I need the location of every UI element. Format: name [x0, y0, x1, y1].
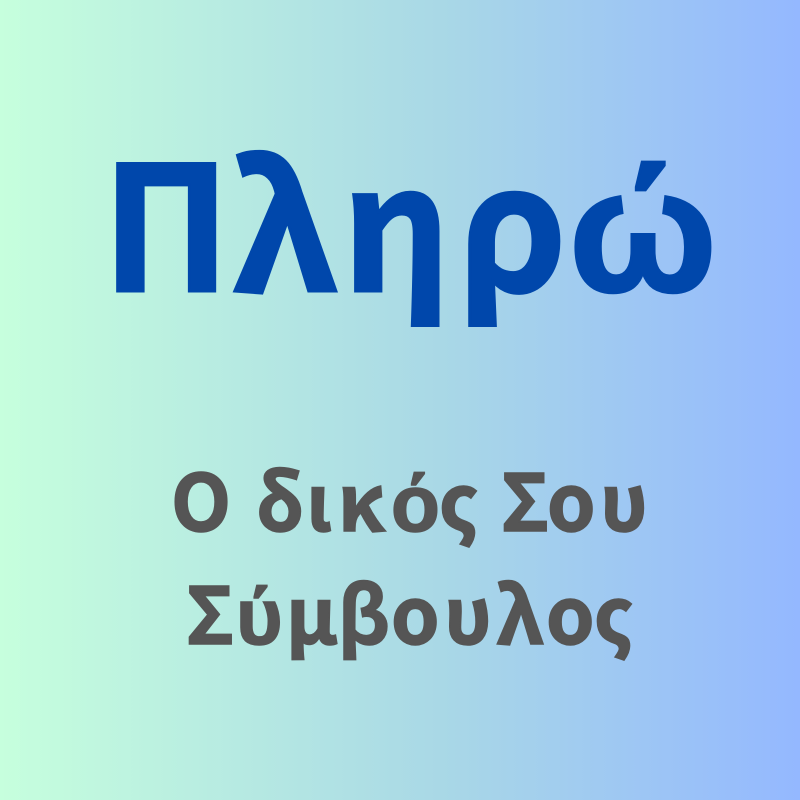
- title: Πληρώ: [102, 91, 717, 341]
- subtitle line 2: Σύμβουλος: [186, 555, 633, 667]
- subtitle line 1: Ο δικός Σου: [171, 442, 648, 554]
